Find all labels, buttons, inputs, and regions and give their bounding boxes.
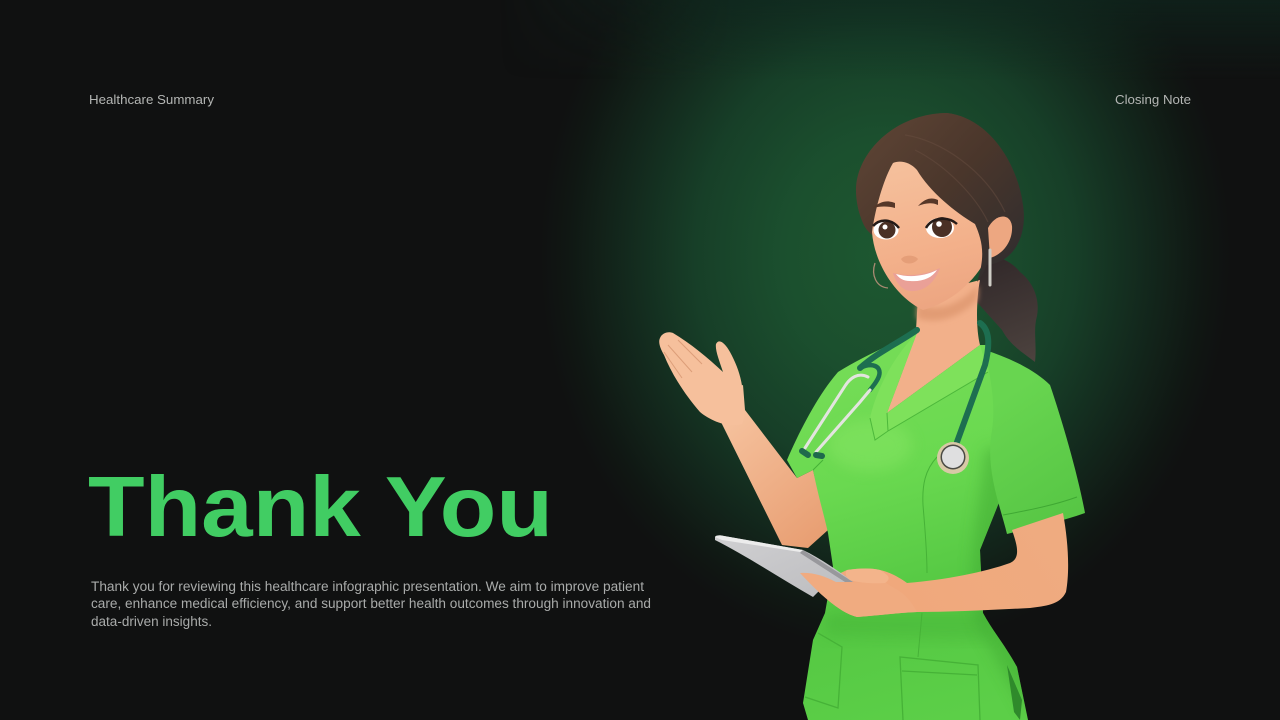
collar <box>870 333 988 440</box>
collar edge lines <box>870 372 988 440</box>
mouth <box>893 268 940 291</box>
stethoscope tube left <box>860 330 917 368</box>
stethoscope tube right <box>957 323 988 442</box>
forearm and holding hand <box>800 513 1068 617</box>
title: Thank You <box>88 460 553 555</box>
nurse illustration <box>659 113 1085 720</box>
face <box>872 156 989 310</box>
right pocket <box>900 657 980 720</box>
ear <box>988 216 1012 258</box>
palm over tablet <box>800 573 917 617</box>
background green glow <box>520 0 1280 700</box>
left pocket <box>805 633 842 708</box>
finger lines <box>664 340 702 378</box>
top green glow <box>877 0 1280 36</box>
body text <box>91 579 651 629</box>
stethoscope ear tips <box>802 451 822 456</box>
body text: data-driven insights. <box>91 614 212 629</box>
front hair <box>857 113 1022 282</box>
tablet <box>715 535 853 597</box>
neck shadow <box>917 285 978 321</box>
neck <box>887 280 980 413</box>
header label: right: Closing Note <box>1115 92 1191 107</box>
hair strands <box>905 135 1005 222</box>
body text: Thank you for reviewing this healthcare infographic presentation. We aim to improve patient <box>91 579 644 594</box>
sleeve hem <box>1003 497 1077 515</box>
hair back <box>856 113 1024 265</box>
left eye <box>873 220 899 240</box>
body text: care, enhance medical efficiency, and support better health outcomes through innovation and <box>91 596 651 611</box>
raised hand <box>659 332 744 425</box>
nose <box>901 256 918 264</box>
left eyebrow <box>873 201 895 208</box>
shirt seams <box>813 457 937 657</box>
ponytail <box>975 255 1038 362</box>
right earring <box>988 250 992 285</box>
stethoscope chest piece <box>937 442 969 474</box>
right eye <box>926 217 957 238</box>
right eyebrow <box>918 198 938 206</box>
side slit <box>1007 665 1022 720</box>
thumb <box>846 568 889 583</box>
left earring <box>874 263 888 288</box>
header label: left: Healthcare Summary <box>89 92 214 107</box>
shirt body <box>787 333 1028 720</box>
raised arm <box>692 385 828 548</box>
shirt shading <box>832 424 1025 707</box>
stethoscope silver binaurals <box>805 375 870 452</box>
right sleeve <box>985 350 1085 534</box>
stethoscope <box>802 323 988 456</box>
stethoscope yoke <box>860 365 880 390</box>
